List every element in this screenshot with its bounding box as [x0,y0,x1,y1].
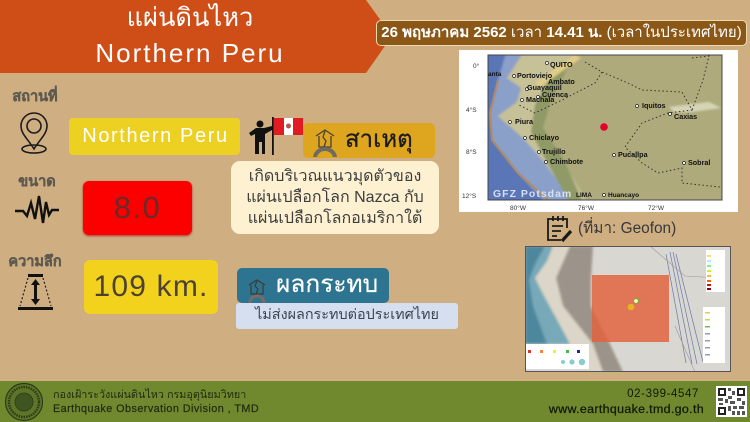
title: แผ่นดินไหว [127,4,253,32]
cause heading text: สาเหตุ [345,126,413,153]
footer contact: 02-399-4547 [627,388,699,400]
map: Geofon epicenter: Portoviejo [517,71,553,80]
footer contact: www.earthquake.tmd.go.th [549,402,704,416]
magnitude value [83,181,192,235]
impact heading text: ผลกระทบ [276,271,378,298]
footer organisation text: Earthquake Observation Division , TMD [53,403,259,415]
date and time bar: 26 พฤษภาคม 2562 เวลา 14.41 น. (เวลาในประเทศไทย) [381,24,742,41]
title [95,3,285,68]
icon: cracked house [313,129,337,157]
map: Geofon epicenter: 0° [473,62,480,70]
icon: seismograph [15,196,59,224]
label: depth: ความลึก [8,254,62,270]
map: Geofon epicenter: GFZ Potsdam [493,188,572,200]
map: Geofon epicenter: Sobral [688,158,710,167]
impact heading [237,268,389,303]
icon: person with Peru flag [249,117,303,155]
footer contact [548,388,704,416]
location value: Northern Peru [82,125,229,147]
map: intensity area [525,246,731,372]
map: Geofon epicenter [459,50,738,212]
map: Geofon epicenter: 12°S [462,192,477,200]
label: location: สถานที่ [12,89,58,105]
map: Geofon epicenter: Piura [515,117,534,126]
icon: cracked house small [248,279,266,303]
depth value: 109 km. [93,270,209,303]
map: Geofon epicenter: anta [488,71,502,78]
magnitude value: 8.0 [114,190,161,225]
footer organisation text [53,388,259,415]
cause description: เกิดบริเวณแนวมุดตัวของ [249,168,421,185]
date and time bar [376,20,747,46]
map: Geofon epicenter: Caxias [674,112,697,121]
cause description [231,161,439,234]
icon: depth arrows [18,274,53,310]
cause description: แผ่นเปลือกโลก Nazca กับ [246,189,424,206]
footer organisation text: กองเฝ้าระวังแผ่นดินไหว กรมอุตุนิยมวิทยา [53,389,246,401]
title: Northern Peru [95,38,285,68]
cause heading [303,123,435,158]
map: Geofon epicenter: Machala [526,95,555,104]
header banner [0,0,385,73]
map: Geofon epicenter: 72°W [648,204,665,212]
source note: (ที่มา: Geofon) [578,220,676,237]
map: Geofon epicenter: Chimbote [550,157,583,166]
map: Geofon epicenter: Cuenca [542,90,569,99]
map: Geofon epicenter: Ambato [548,77,575,86]
map: Geofon epicenter: Chiclayo [529,133,560,142]
icon: notepad with pen [547,216,572,242]
depth value [84,260,218,314]
label: magnitude: ขนาด [18,174,56,190]
map: Geofon epicenter: 8°S [466,148,477,156]
icon: location pin [20,112,48,154]
map: Geofon epicenter: Trujillo [542,147,566,156]
impact description: ไม่ส่งผลกระทบต่อประเทศไทย [255,307,439,323]
map: Geofon epicenter: Huancayo [608,192,639,199]
map: Geofon epicenter: 80°W [510,204,527,212]
map: Geofon epicenter: 76°W [578,204,595,212]
location value [69,118,240,155]
QR code [716,386,747,417]
map: Geofon epicenter: Guayaquil [527,83,562,92]
impact description [236,303,458,329]
footer band [0,381,750,422]
map: Geofon epicenter: LIMA [576,192,592,199]
cause description: แผ่นเปลือกโลกอเมริกาใต้ [248,210,422,227]
map: Geofon epicenter: Pucallpa [618,150,649,159]
map: Geofon epicenter: Iquitos [642,101,666,110]
map: Geofon epicenter: QUITO [550,60,573,69]
logo: TMD seal [4,382,44,422]
map: Geofon epicenter: 4°S [466,106,477,114]
